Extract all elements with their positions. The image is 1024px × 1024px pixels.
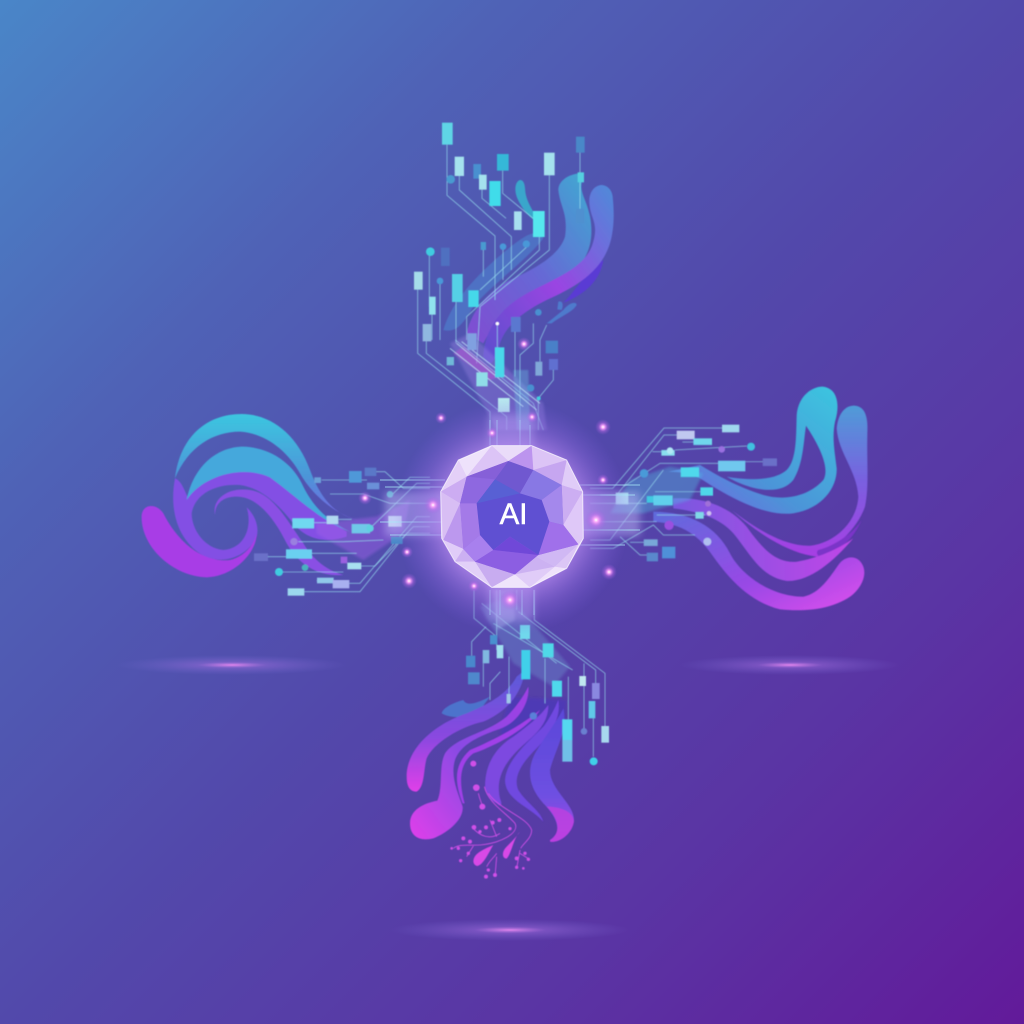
ground glow: left	[117, 655, 347, 675]
bottom circuit traces	[472, 590, 605, 757]
AI label: AI	[500, 498, 527, 531]
right branch	[590, 387, 868, 610]
left branch	[142, 414, 430, 596]
bottom data beam	[480, 590, 570, 687]
top flowing ribbons	[443, 173, 614, 364]
right circuit traces	[590, 428, 763, 555]
bottom flowing ribbons	[407, 670, 574, 842]
bottom data nodes	[466, 625, 609, 765]
ground glow: right	[680, 655, 900, 675]
left data nodes	[254, 468, 403, 596]
top branch	[414, 123, 614, 430]
faceted gem	[441, 446, 583, 587]
AI crystal core	[441, 446, 583, 587]
right data nodes	[616, 425, 777, 561]
right flowing ribbons	[610, 387, 868, 610]
sparkles	[358, 337, 617, 610]
bottom branch	[407, 590, 609, 879]
left flowing ribbons	[142, 414, 410, 577]
core glow and light beams	[380, 399, 640, 635]
ground glow: bottom	[390, 919, 630, 941]
top data beam	[450, 333, 547, 430]
top data nodes	[414, 123, 585, 412]
left circuit traces	[268, 472, 430, 592]
top circuit traces	[418, 145, 580, 430]
bottom tree ornament	[450, 761, 532, 879]
